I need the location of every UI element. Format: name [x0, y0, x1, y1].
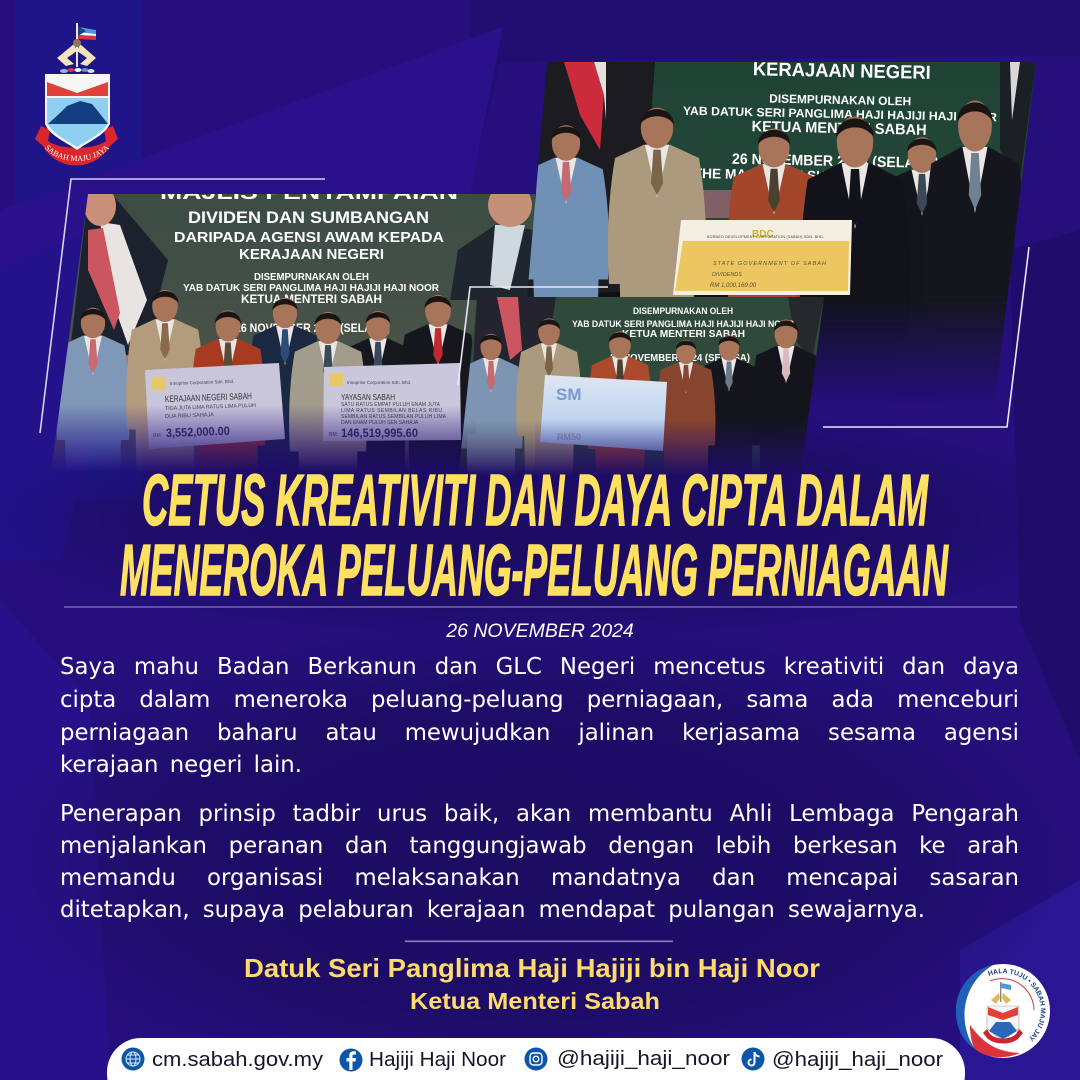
cheque: light blue: SM: [556, 385, 582, 404]
screen wording: 26 NOVEMBER 2024 (SELASA): [235, 323, 390, 335]
signature name: Datuk Seri Panglima Haji Hajiji bin Haji Noor: [244, 953, 820, 983]
cheque: BDC dividends: STATE GOVERNMENT OF SABAH: [713, 261, 826, 267]
paragraph 1: perniagaan baharu atau mewujudkan jalinan kerjasama sesama agensi: [60, 720, 1019, 746]
dignitaries, centre photo: [461, 318, 816, 472]
screen wording: KETUA MENTERI SABAH: [751, 118, 927, 139]
cheque: BDC dividends: BORNEO DEVELOPMENT CORPORATION (SABAH) SDN. BHD.: [707, 235, 824, 239]
icon: tiktok: [742, 1048, 764, 1070]
dignitaries, left photo: [56, 290, 476, 466]
cheque: BDC dividends: BDC: [752, 229, 774, 240]
stage front, dark: [598, 292, 938, 387]
stage screen: [50, 194, 540, 484]
screen wording: DIVIDEN DAN SUMBANGAN: [188, 208, 429, 227]
stage screen: [460, 297, 824, 468]
cheque: Yayasan Sabah: YAYASAN SABAH: [341, 392, 395, 402]
screen wording: YAB DATUK SERI PANGLIMA HAJI HAJIJI HAJI NOOR: [572, 319, 794, 329]
dignitaries, right photo: [528, 100, 1022, 304]
ribbon motto: [35, 126, 118, 166]
screen wording: YAB DATUK SERI PANGLIMA HAJI HAJIJI HAJI NOOR: [183, 283, 440, 294]
cheque: Kerajaan Negeri Sabah: KERAJAAN NEGERI SABAH: [165, 391, 252, 404]
paragraph 1: kerajaan negeri lain.: [60, 752, 302, 778]
signature role: Ketua Menteri Sabah: [410, 988, 660, 1014]
cheque: Kerajaan Negeri Sabah: [145, 363, 285, 449]
cheque: Kerajaan Negeri Sabah: DUA RIBU SAHAJA: [165, 412, 214, 420]
icon: instagram: [524, 1048, 548, 1070]
cheque: Yayasan Sabah: SATU RATUS EMPAT PULUH ENAM JUTA: [341, 402, 441, 408]
date: 26 NOVEMBER 2024: [446, 620, 634, 642]
photo: cheque presentation, centre: [460, 297, 824, 472]
title: [120, 461, 949, 611]
ribbon motto: SABAH MAJU JAYA: [45, 145, 110, 162]
cheque: Yayasan Sabah: [323, 363, 461, 441]
photo: cheque presentation, left: [52, 194, 535, 468]
cheque: BDC dividends: RM 1,000,160.00: [710, 283, 757, 289]
cheque: BDC dividends: [673, 220, 852, 295]
paragraph 1: cipta dalam meneroka peluang-peluang perniagaan, sama ada menceburi: [60, 687, 1019, 713]
tiktok text: @hajiji_haji_noor: [772, 1049, 943, 1071]
screen wording: 26 NOVEMBER 2024 (SELASA): [732, 151, 939, 172]
paragraph 2: ditetapkan, supaya pelaburan kerajaan mendapat pulangan sewajarnya.: [60, 897, 925, 923]
cheque: Kerajaan Negeri Sabah: Innoprise Corporation Sdn. Bhd.: [170, 379, 234, 386]
frame lines around photos: [40, 179, 1029, 433]
photo: cheque presentation, top right: [527, 62, 1036, 396]
divider above signature: [405, 940, 673, 942]
left portrait on screen: [515, 62, 655, 300]
logo: Sabah state crest: [35, 23, 118, 166]
cheque: BDC dividends: DIVIDENDS: [712, 272, 742, 278]
screen wording: [683, 62, 997, 179]
website text: cm.sabah.gov.my: [152, 1049, 323, 1071]
small crest: [983, 982, 1023, 1044]
paragraph 1: [60, 654, 1019, 778]
cheque: Yayasan Sabah: Innoprise Corporation Sdn. Bhd.: [347, 380, 411, 385]
cheque: Yayasan Sabah: DAN ENAM PULUH SEN SAHAJA: [341, 420, 419, 426]
paragraph 2: menjalankan peranan dan tanggungjawab dengan lebih berkesan ke arah: [60, 833, 1019, 859]
paragraph 2: Penerapan prinsip tadbir urus baik, akan membantu Ahli Lembaga Pengarah: [60, 801, 1019, 827]
cheque: Kerajaan Negeri Sabah: 3,552,000.00: [166, 424, 230, 440]
cheque: Yayasan Sabah: SEMBILAN RATUS SEMBILAN PULUH LIMA: [341, 414, 447, 420]
cheque: Kerajaan Negeri Sabah: TIGA JUTA LIMA RATUS LIMA PULUH: [165, 403, 256, 412]
cheque: Yayasan Sabah: LIMA RATUS SEMBILAN BELAS RIBU: [341, 408, 442, 414]
screen wording: DISEMPURNAKAN OLEH: [769, 92, 911, 108]
screen wording: KERAJAAN NEGERI: [239, 246, 384, 263]
screen wording: KETUA MENTERI SABAH: [622, 328, 745, 340]
icon: website globe: [122, 1048, 144, 1070]
facebook text: Hajiji Haji Noor: [369, 1049, 506, 1071]
right portrait on screen: [685, 62, 1036, 218]
screen wording: KETUA MENTERI SABAH: [241, 294, 382, 306]
right portrait on screen: [450, 194, 533, 300]
screen wording: [160, 183, 458, 335]
logo: Hala Tuju Sabah Maju Jaya: HALA TUJU • SABAH MAJU JAYA: [988, 968, 1046, 1042]
screen wording: DARIPADA AGENSI AWAM KEPADA: [174, 229, 444, 246]
screen wording: KERAJAAN NEGERI: [753, 59, 931, 84]
cheque: Kerajaan Negeri Sabah: RM: [153, 433, 161, 439]
screen portraits: [473, 297, 824, 368]
screen wording: THE MAGELLAN SUTERA: [693, 165, 864, 185]
divider under title: [64, 606, 1017, 608]
flag and pole: [76, 23, 96, 67]
social media bar: [107, 1038, 965, 1080]
shield: [45, 74, 110, 150]
cheque: Yayasan Sabah: RM: [329, 432, 337, 438]
screen wording: DISEMPURNAKAN OLEH: [254, 272, 369, 283]
screen wording: [572, 306, 794, 364]
screen wording: MAJLIS PENYAMPAIAN: [160, 183, 458, 204]
cheque: light blue: [540, 375, 667, 451]
left portrait on screen: [71, 194, 168, 366]
paragraph 2: memandu organisasi melaksanakan mandatnya dan mencapai sasaran: [60, 865, 1019, 891]
screen wording: YAB DATUK SERI PANGLIMA HAJI HAJIJI HAJI NOOR: [683, 104, 997, 124]
cheque: Yayasan Sabah: 146,519,995.60: [341, 426, 418, 440]
stage screen: [652, 62, 1036, 220]
screen wording: DISEMPURNAKAN OLEH: [633, 306, 733, 316]
paragraph 1: Saya mahu Badan Berkanun dan GLC Negeri mencetus kreativiti dan daya: [60, 654, 1019, 680]
arms holding pole: [57, 39, 96, 73]
screen wording: 26 NOVEMBER 2024 (SELASA): [610, 352, 750, 364]
cheque: light blue: RM50: [557, 432, 581, 442]
instagram text: @hajiji_haji_noor: [557, 1048, 730, 1070]
icon: facebook: [340, 1048, 362, 1072]
